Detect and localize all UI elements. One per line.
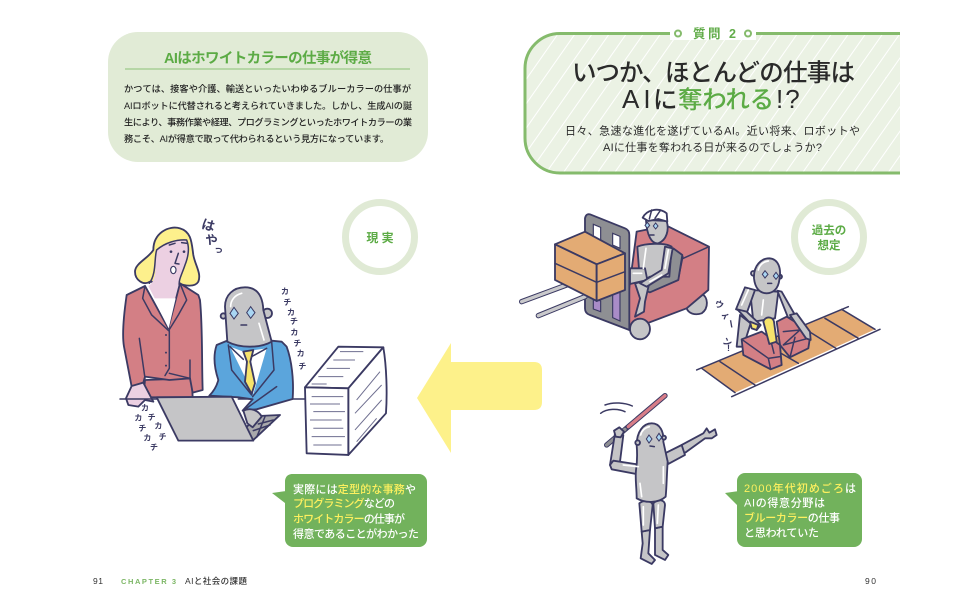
callout: reality: 実際には定型的な事務や (293, 482, 416, 496)
header description: 日々、急速な進化を遂げているAI。近い将来、ロボットや (565, 124, 860, 138)
main title: 奪われる (678, 86, 774, 114)
header description (565, 124, 860, 154)
sound effect: typing left: カ (154, 421, 162, 430)
sound effect: typing right: カ (297, 349, 305, 358)
sound effect: typing right: チ (283, 298, 291, 307)
badge: past assumption (794, 202, 864, 272)
sound effect: typing right: チ (298, 362, 306, 371)
footer: left page: AIと社会の課題 (185, 576, 247, 586)
main title: ほとんどの仕事は (665, 59, 855, 87)
sound effect: drill noise: ウ (713, 298, 725, 311)
badge: past assumption: 過去の (812, 223, 846, 237)
panel body text: AIロボットに代替されると考えられていきました。しかし、生成AIの誕 (124, 100, 412, 111)
sound effect: typing right: チ (293, 339, 301, 348)
panel: question 2 header (525, 26, 900, 173)
main title: !? (776, 84, 802, 114)
sound effect: typing left: チ (159, 432, 167, 441)
swing motion lines (601, 403, 632, 413)
callout: past assumption: と思われていた (744, 526, 819, 540)
callout: reality: プログラミングなどの (293, 496, 395, 510)
badge: past assumption: 想定 (818, 238, 841, 252)
sound effect: hayatt (200, 216, 224, 256)
panel: AI is good at white-collar work (108, 32, 428, 162)
callout: reality (272, 474, 427, 547)
conveyor belt (697, 307, 880, 397)
sound effect: drill noise: ン (721, 336, 734, 349)
panel body text: 生により、事務作業や経理、プログラミングといったホワイトカラーの業 (124, 116, 412, 128)
callout: past assumption: AIの得意分野は (744, 496, 825, 510)
footer: left page: CHAPTER 3 (121, 577, 176, 586)
panel body text (124, 83, 412, 144)
sound effect: typing right (281, 287, 306, 371)
sound effect: hayatt: や (203, 232, 219, 249)
sound effect: hayatt: っ (213, 244, 224, 256)
sound effect: drill noise (713, 298, 736, 353)
header description: AIに仕事を奪われる日が来るのでしょうか? (603, 140, 822, 154)
assembling robot (736, 258, 811, 369)
main title: に (653, 87, 678, 114)
woman (123, 228, 203, 407)
sound effect: typing left: チ (148, 413, 156, 422)
sound effect: typing right: チ (290, 317, 298, 326)
panel body text: かつては、接客や介護、輸送といったいわゆるブルーカラーの仕事が (124, 83, 411, 94)
sound effect: typing left: チ (138, 424, 146, 433)
sound effect: typing right: カ (281, 287, 289, 296)
illustration: robot swinging a bat (601, 396, 717, 564)
stack of papers (305, 347, 387, 455)
question label (670, 26, 756, 41)
sound effect: drill noise: ー (725, 319, 736, 329)
panel heading: AIはホワイトカラーの仕事が得意 (164, 49, 372, 67)
footer: left page: 91 (93, 576, 103, 586)
badge: reality: 現 実 (366, 230, 394, 245)
callout: past assumption: 2000年代初めごろは (744, 481, 856, 495)
badge: reality (346, 202, 414, 272)
laptop (157, 397, 280, 441)
illustration: forklift (522, 214, 709, 339)
sound effect: typing left: チ (150, 443, 158, 452)
sound effect: hayatt: は (200, 216, 217, 234)
question label: 質問 2 (693, 26, 736, 41)
table edge (120, 397, 307, 401)
bat (607, 396, 665, 445)
callout: past assumption: ブルーカラーの仕事 (744, 510, 840, 524)
robot driver with hard hat (630, 210, 682, 317)
sound effect: typing left (134, 404, 167, 452)
sound effect: typing right: カ (287, 308, 295, 317)
panel body text: 務こそ、AIが得意で取って代わられるという見方になっています。 (124, 133, 389, 144)
footer: right page number: 90 (865, 576, 876, 586)
office robot (209, 287, 293, 411)
callout: reality: 得意であることがわかった (293, 526, 419, 540)
arrow: yellow pointing left (417, 343, 542, 453)
standing robot (610, 423, 717, 564)
sound effect: typing left: カ (143, 434, 151, 443)
callout: reality: ホワイトカラーの仕事が (293, 512, 405, 526)
footer: left page (93, 576, 247, 586)
sound effect: typing right: カ (290, 328, 298, 337)
sound effect: drill noise: ! (727, 343, 730, 353)
illustration: woman and robot at office desk (120, 216, 387, 455)
callout: past assumption (725, 473, 862, 547)
sound effect: typing left: カ (141, 404, 149, 413)
sound effect: typing left: カ (134, 414, 142, 423)
main title (572, 59, 855, 114)
conveyor belt and robot assembling (697, 258, 880, 397)
sound effect: drill noise: ィ (719, 309, 731, 322)
main title: AI (622, 84, 655, 114)
main title: いつか、 (572, 60, 666, 87)
